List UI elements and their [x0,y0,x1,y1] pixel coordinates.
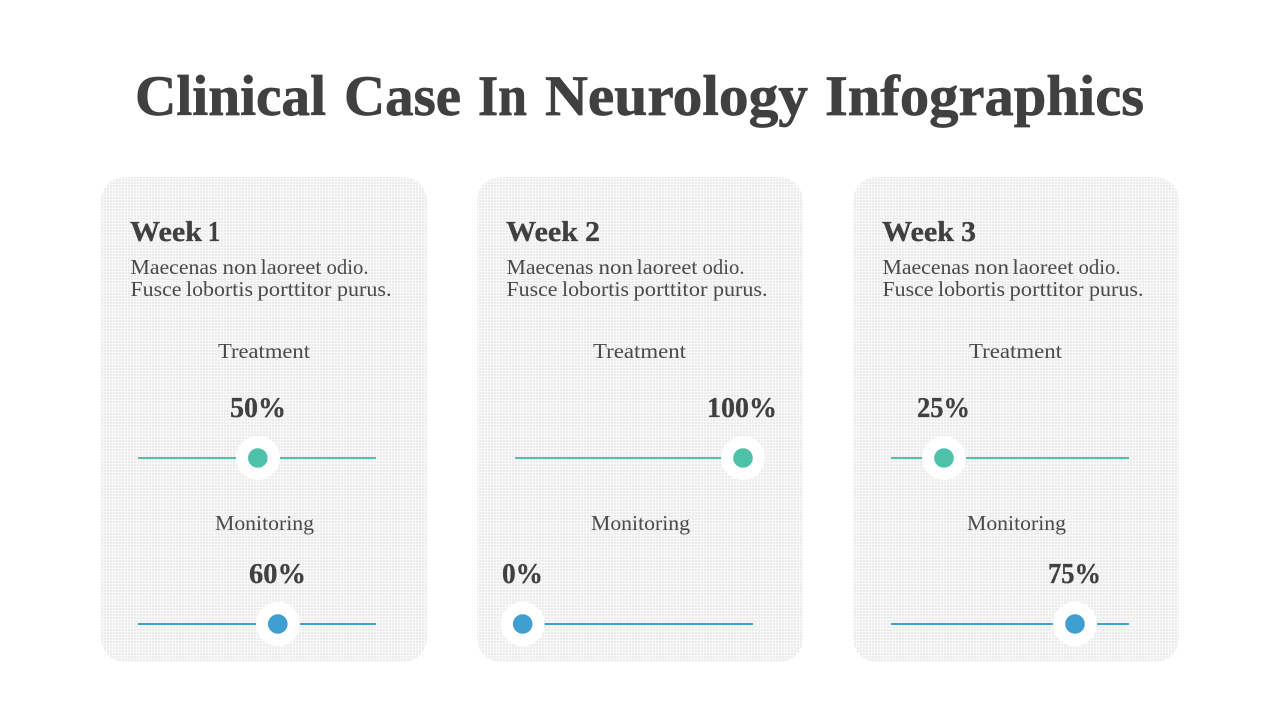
text block: week 3 description [882,255,1144,301]
value: monitoring 0%: 0% [502,559,543,590]
title [135,65,1144,128]
label: treatment: Treatment [969,339,1062,363]
label: treatment: Treatment [593,339,686,363]
slider: monitoring 0% [501,602,753,646]
title: Case [344,65,461,128]
value: treatment 50%: 50% [230,393,286,424]
slider: monitoring 60% [138,602,376,646]
title: Infographics [825,65,1144,128]
text block: week 3 description: porttitor [1010,277,1084,301]
text block: week 2 description: Fusce [506,277,558,301]
text block: week 2 description: laoreet [636,255,698,279]
value: monitoring 75%: 75% [1048,559,1101,590]
text block: week 3 description: purus. [1089,277,1144,301]
text block: week 3 description: laoreet [1012,255,1074,279]
text block: week 2 description: purus. [713,277,768,301]
text block: week 3 description: non [974,255,1010,279]
text block: week 3 description: odio. [1078,255,1120,279]
heading: week 1: Week [130,216,203,248]
text block: week 3 description: Fusce [882,277,934,301]
label: monitoring: Monitoring [591,511,691,535]
text block: week 2 description: non [598,255,634,279]
panel background: week 2 [477,177,803,662]
slider: treatment 100% [515,436,765,480]
value: treatment 100%: 100% [707,393,777,424]
heading: week 2: 2 [585,216,600,248]
text block: week 3 description: lobortis [938,277,1005,301]
panel: week 1 [101,177,427,662]
label: monitoring: Monitoring [967,511,1067,535]
text block: week 2 description: odio. [702,255,744,279]
heading: week 2: Week [506,216,579,248]
text block: week 2 description: lobortis [562,277,629,301]
text block: week 1 description: lobortis [186,277,253,301]
panel: week 3 [853,177,1179,662]
text block: week 1 description: Maecenas [130,255,218,279]
value: treatment 25%: 25% [917,393,970,424]
value: monitoring 60%: 60% [249,559,306,590]
text block: week 2 description: porttitor [634,277,708,301]
heading: week 1: 1 [208,216,220,248]
text block: week 1 description: purus. [337,277,392,301]
text block: week 1 description: odio. [326,255,368,279]
title: Neurology [545,65,808,128]
heading: week 3: 3 [961,216,976,248]
panel background: week 1 [101,177,427,662]
text block: week 2 description: Maecenas [506,255,594,279]
text block: week 1 description [130,255,392,301]
panel background: week 3 [853,177,1179,662]
heading: week 3: Week [882,216,955,248]
slider: treatment 50% [138,436,376,480]
text block: week 1 description: porttitor [258,277,332,301]
slider: monitoring 75% [891,602,1129,646]
text block: week 1 description: laoreet [260,255,322,279]
slider: treatment 25% [891,436,1129,480]
title: Clinical [135,65,326,128]
label: treatment: Treatment [218,339,310,363]
text block: week 1 description: Fusce [130,277,182,301]
title: In [478,65,527,128]
panel: week 2 [477,177,803,662]
label: monitoring: Monitoring [215,511,315,535]
text block: week 1 description: non [222,255,258,279]
text block: week 3 description: Maecenas [882,255,970,279]
text block: week 2 description [506,255,768,301]
